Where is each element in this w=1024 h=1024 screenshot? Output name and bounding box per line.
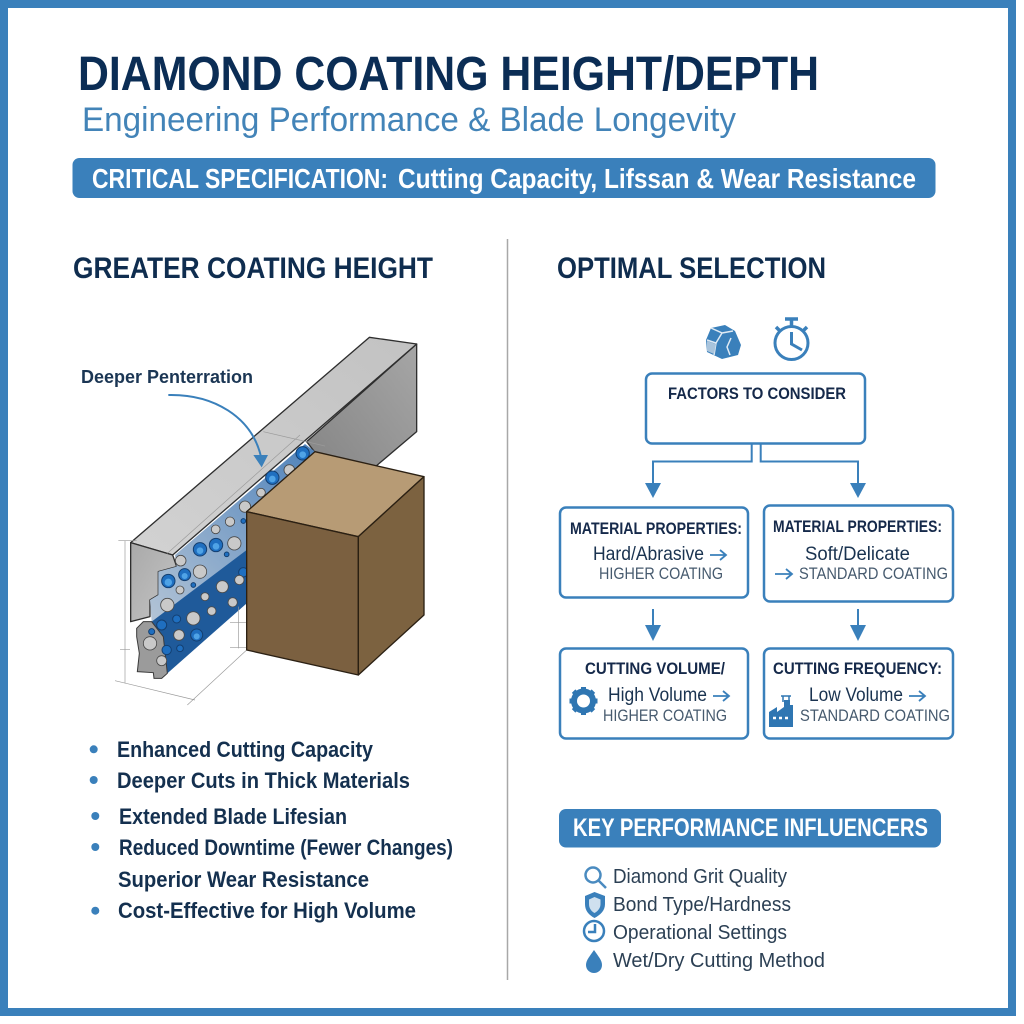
heading: greater coating height: GREATER COATING HEIGHT bbox=[73, 252, 433, 285]
banner: key performance influencers: KEY PERFORMANCE INFLUENCERS bbox=[573, 814, 928, 842]
box: cutting frequency bbox=[764, 648, 953, 738]
box: cutting frequency: Low Volume bbox=[809, 685, 903, 706]
list: performance influencers bbox=[584, 866, 825, 973]
box: cutting volume bbox=[560, 648, 748, 738]
banner: key performance influencers bbox=[559, 809, 941, 848]
diamond grit particles bbox=[143, 447, 309, 666]
box: material properties hard: Hard/Abrasive bbox=[593, 544, 704, 565]
box: material properties hard bbox=[560, 508, 748, 598]
box: cutting volume: High Volume bbox=[608, 685, 707, 706]
banner: critical specification bbox=[72, 158, 936, 198]
box: cutting volume: HIGHER COATING bbox=[603, 706, 727, 725]
benefits list bbox=[90, 737, 453, 923]
list: performance influencers: Diamond Grit Quality bbox=[613, 866, 787, 888]
icon: water drop bbox=[586, 950, 602, 973]
box: factors to consider bbox=[646, 374, 865, 444]
workpiece block bbox=[247, 452, 424, 675]
arrow: penetration bbox=[168, 395, 268, 467]
coated segment bbox=[137, 444, 315, 678]
benefits list: Superior Wear Resistance bbox=[118, 867, 369, 892]
benefits list: Cost-Effective for High Volume bbox=[118, 898, 416, 923]
label: deeper penetration: Deeper Penterration bbox=[81, 366, 253, 387]
icon: rock bbox=[706, 325, 741, 359]
icon: clock bbox=[584, 921, 604, 941]
subtitle: Engineering Performance & Blade Longevity bbox=[82, 101, 736, 139]
icon: stopwatch bbox=[775, 319, 808, 360]
illustration: blade cutting block bbox=[115, 337, 424, 705]
banner: critical specification: CRITICAL SPECIFICATION: bbox=[92, 163, 388, 194]
box: cutting frequency: CUTTING FREQUENCY: bbox=[773, 659, 942, 678]
benefits list: Deeper Cuts in Thick Materials bbox=[117, 768, 410, 793]
list: performance influencers: Wet/Dry Cutting Method bbox=[613, 950, 825, 972]
box: material properties soft bbox=[764, 506, 953, 602]
panel: optimal selection bbox=[557, 252, 953, 973]
benefits list: Reduced Downtime (Fewer Changes) bbox=[119, 835, 453, 860]
box: material properties soft: MATERIAL PROPERTIES: bbox=[773, 517, 942, 536]
arrow: to right branch bbox=[761, 444, 866, 498]
icon: shield bbox=[585, 892, 605, 918]
box: material properties hard: HIGHER COATING bbox=[599, 564, 723, 583]
list: performance influencers: Operational Settings bbox=[613, 922, 787, 944]
benefits list: Extended Blade Lifesian bbox=[119, 804, 347, 829]
arrow: to left branch bbox=[645, 444, 752, 498]
banner: critical specification: Cutting Capacity, Lifssan & Wear Resistance bbox=[398, 163, 916, 194]
column divider bbox=[506, 239, 508, 980]
title: DIAMOND COATING HEIGHT/DEPTH bbox=[78, 48, 819, 101]
list: performance influencers: Bond Type/Hardness bbox=[613, 894, 791, 916]
box: cutting frequency: STANDARD COATING bbox=[800, 706, 950, 725]
box: material properties soft: STANDARD COATING bbox=[799, 564, 948, 583]
box: material properties hard: MATERIAL PROPERTIES: bbox=[570, 519, 742, 538]
arrow: left down bbox=[645, 609, 661, 641]
box: material properties soft: Soft/Delicate bbox=[805, 544, 910, 565]
icon: factory bbox=[769, 696, 793, 727]
panel: greater coating height bbox=[73, 252, 453, 923]
arrow: right down bbox=[850, 609, 866, 641]
icon: gear bbox=[570, 687, 598, 715]
icon: magnifier bbox=[586, 868, 606, 888]
dimension lines bbox=[115, 432, 325, 705]
heading: optimal selection: OPTIMAL SELECTION bbox=[557, 252, 826, 285]
benefits list: Enhanced Cutting Capacity bbox=[117, 737, 374, 762]
box: factors to consider: FACTORS TO CONSIDER bbox=[668, 384, 846, 403]
box: cutting volume: CUTTING VOLUME/ bbox=[585, 659, 725, 678]
blade body bbox=[131, 337, 417, 622]
